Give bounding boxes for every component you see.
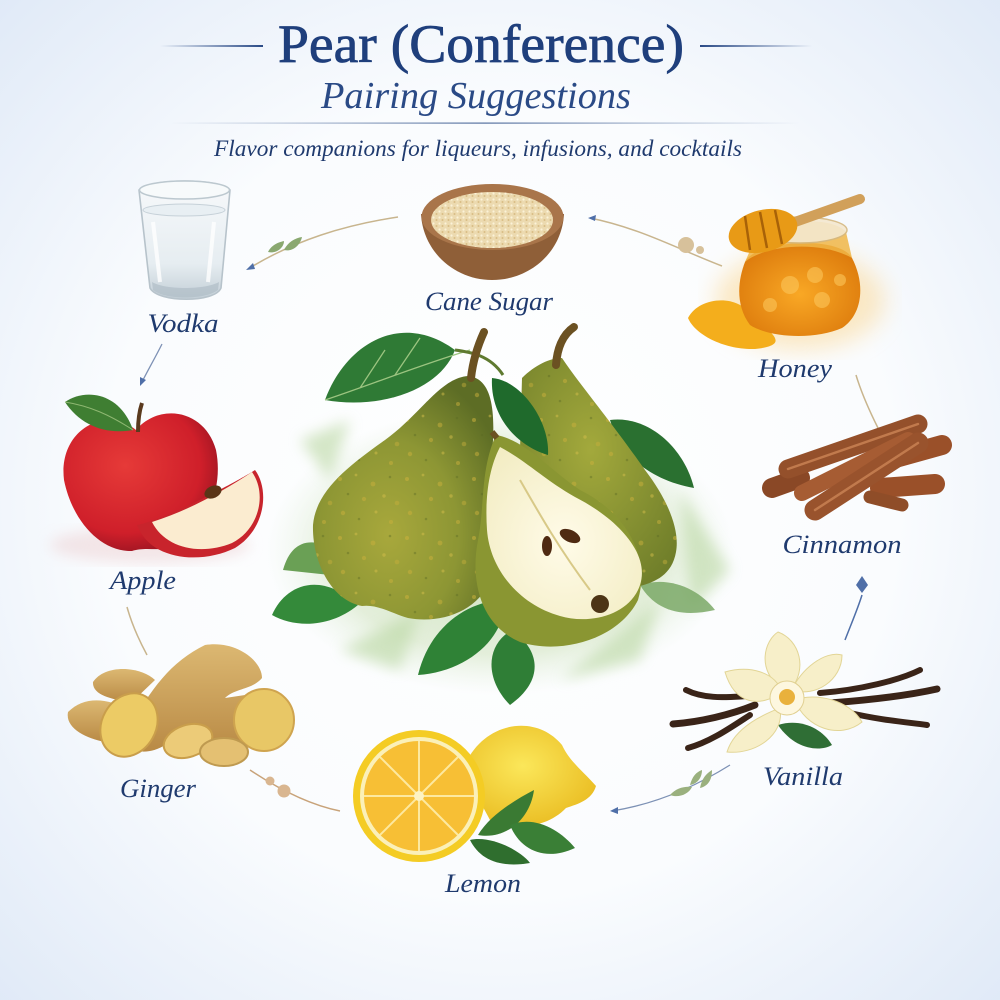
label: cinnamon: Cinnamon <box>782 530 902 559</box>
middle leaf <box>492 378 548 455</box>
icon: cinnamon <box>772 424 942 510</box>
icon: vanilla <box>673 632 937 752</box>
subtitle: Pairing Suggestions <box>320 75 631 117</box>
left pear <box>313 376 494 619</box>
arrow: apple to ginger <box>127 607 147 655</box>
icon: apple <box>50 395 263 563</box>
label: vodka: Vodka <box>148 309 218 338</box>
title: Pear (Conference) <box>278 14 684 74</box>
arrow: ginger to lemon <box>250 770 340 811</box>
back pear <box>520 358 677 586</box>
arrow: vanilla to cinnamon <box>845 576 868 640</box>
label: apple: Apple <box>108 566 176 595</box>
icon: lemon <box>353 726 596 864</box>
label: cane sugar: Cane Sugar <box>425 287 554 316</box>
arrow: vodka to apple <box>140 344 162 386</box>
arrow: honey to cane sugar <box>588 215 722 266</box>
cut pear <box>475 435 641 647</box>
tagline: Flavor companions for liqueurs, infusions, and cocktails <box>213 136 742 161</box>
icon: cane sugar bowl <box>421 184 564 280</box>
label: vanilla: Vanilla <box>763 762 843 791</box>
icon: ginger <box>68 644 294 767</box>
icon: honey jar <box>688 199 885 350</box>
icon: pears <box>265 327 735 705</box>
icon: vodka glass <box>139 181 230 299</box>
arrow: vodka to cane sugar <box>246 217 398 270</box>
pear seeds <box>542 536 552 556</box>
label: lemon: Lemon <box>444 869 521 898</box>
back leaves <box>325 333 455 403</box>
arrow: honey to cinnamon <box>856 375 878 428</box>
label: honey: Honey <box>757 354 832 383</box>
arrow: vanilla to lemon <box>610 765 730 814</box>
label: ginger: Ginger <box>120 774 197 803</box>
